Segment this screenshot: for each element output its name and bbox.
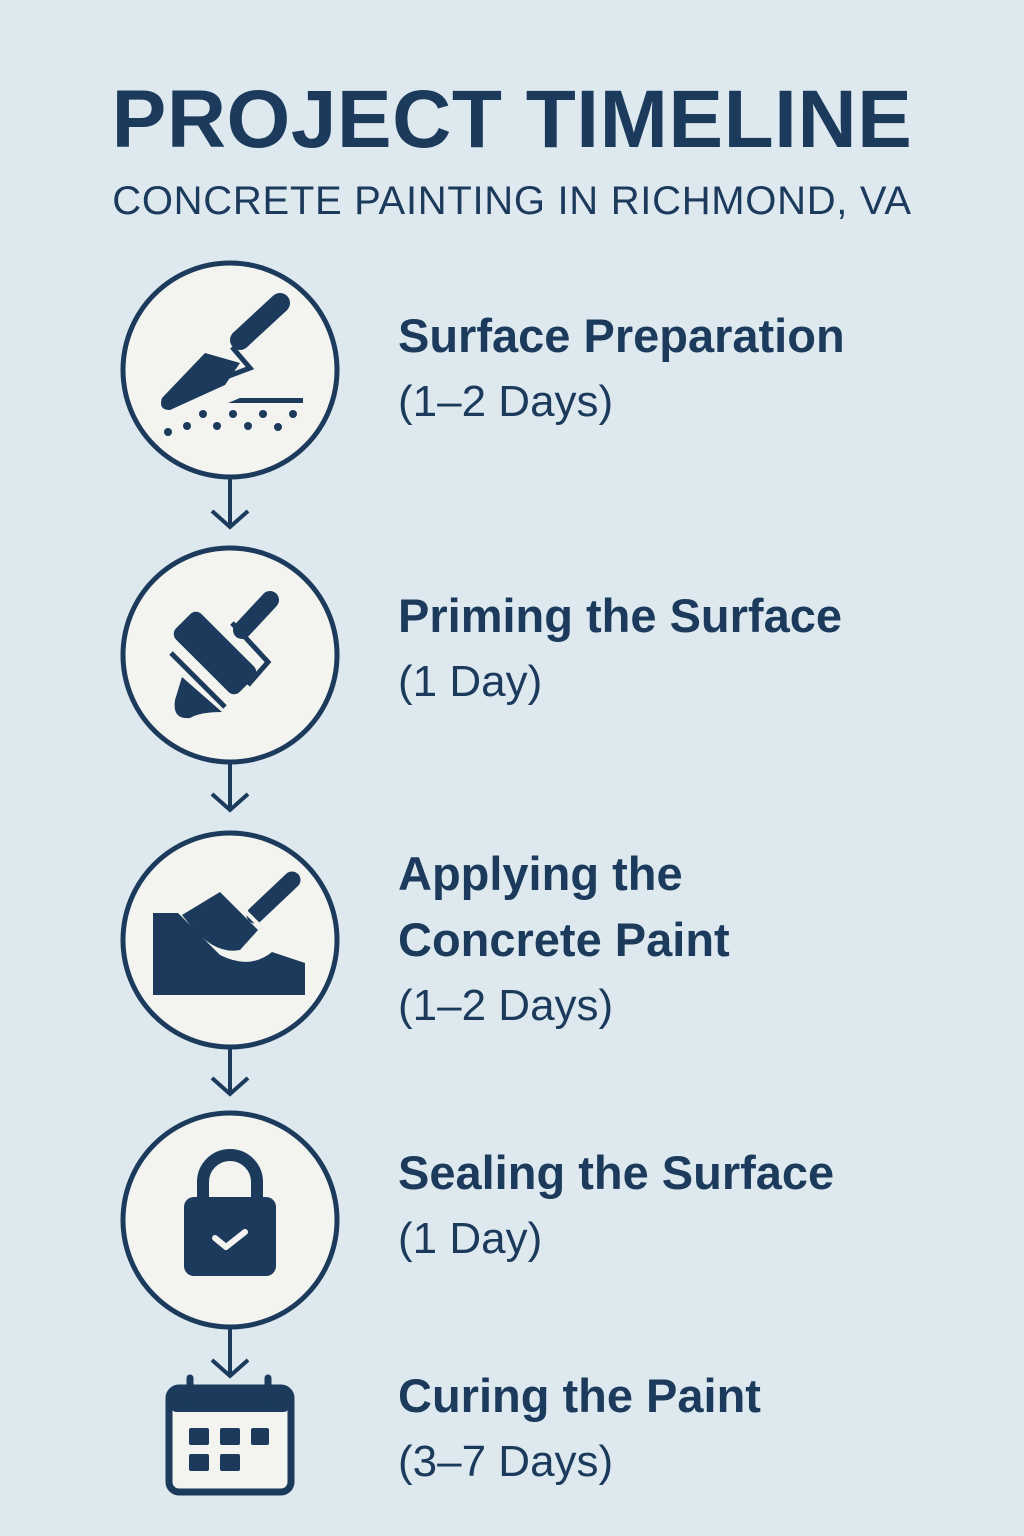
step 3 text: (1–2 Days) (398, 981, 613, 1030)
icon: roller (123, 548, 337, 762)
icon: trowel (123, 263, 337, 477)
step 5 text (398, 1369, 761, 1486)
arrow 3 (212, 1047, 248, 1094)
step 1 text (398, 309, 845, 426)
arrow 2 (212, 762, 248, 810)
step 4 text: Sealing the Surface (398, 1146, 834, 1199)
step 5 text: Curing the Paint (398, 1369, 761, 1422)
arrow 4 (212, 1328, 248, 1376)
arrow 1 (212, 478, 248, 527)
step 5 text: (3–7 Days) (398, 1437, 613, 1486)
step 3 text: Concrete Paint (398, 913, 730, 966)
step 2 text: Priming the Surface (398, 589, 842, 642)
step 2 text: (1 Day) (398, 657, 542, 706)
step 1 text: Surface Preparation (398, 309, 845, 362)
icon: lock (123, 1113, 337, 1327)
step 4 text: (1 Day) (398, 1214, 542, 1263)
step 1 text: (1–2 Days) (398, 377, 613, 426)
step 2 text (398, 589, 842, 706)
title: PROJECT TIMELINE (112, 74, 912, 165)
step 4 text (398, 1146, 834, 1263)
icon: brush (123, 833, 337, 1047)
subtitle: CONCRETE PAINTING IN RICHMOND, VA (112, 179, 912, 223)
icon: calendar (169, 1378, 291, 1492)
step 3 text (398, 847, 730, 1030)
step 3 text: Applying the (398, 847, 683, 900)
